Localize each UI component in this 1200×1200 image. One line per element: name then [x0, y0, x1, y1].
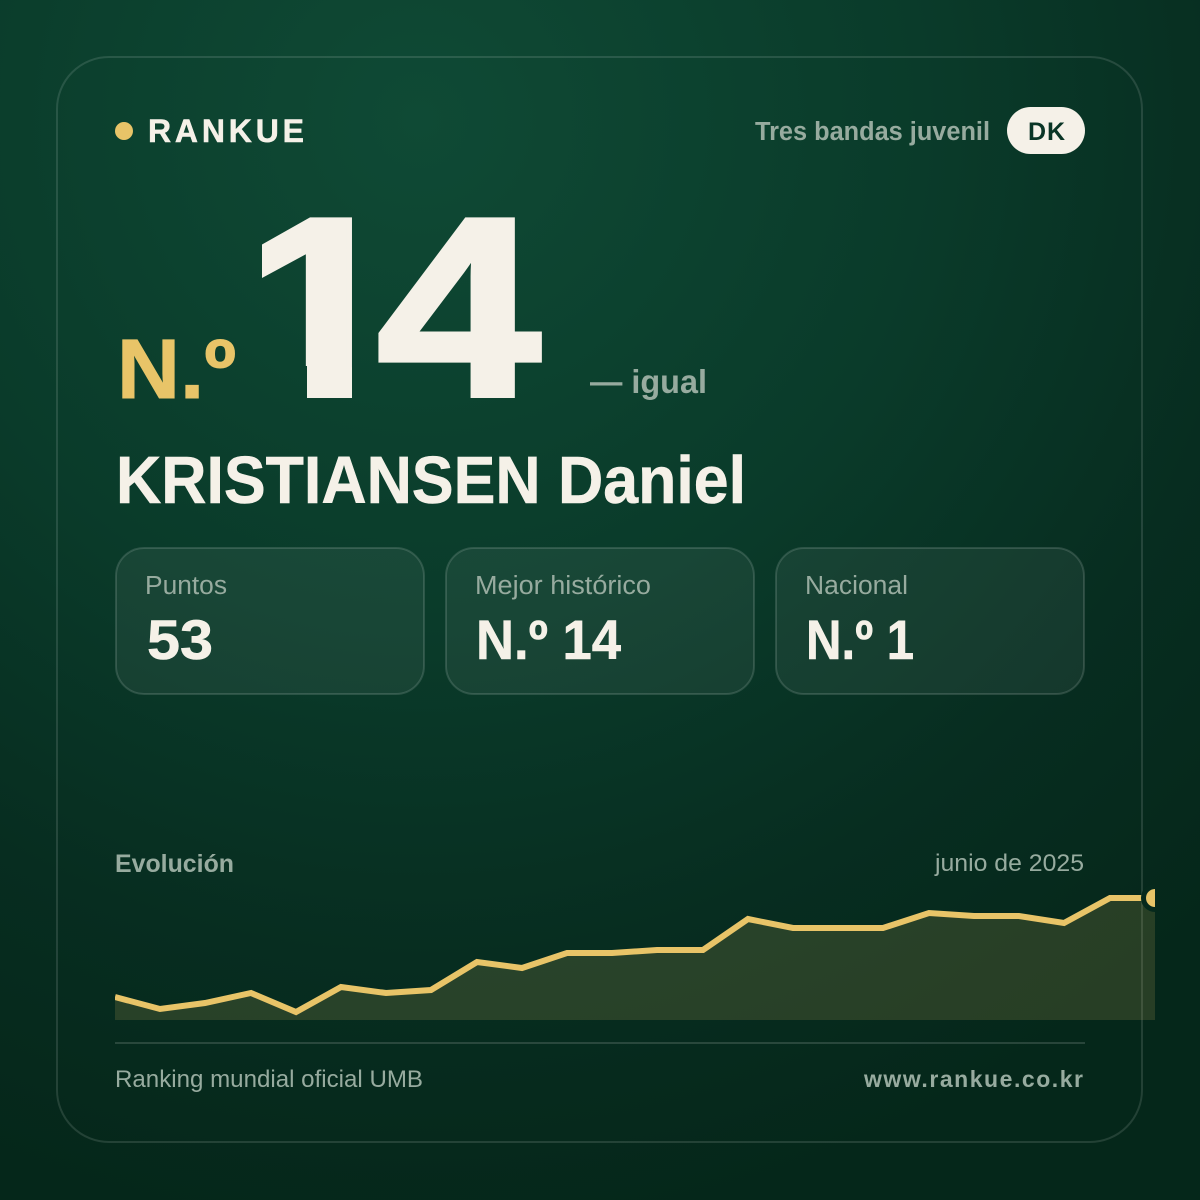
chart date: junio de 2025 [934, 850, 1084, 877]
rank change: — igual [590, 363, 707, 400]
panel: mejor historico: Mejor histórico [475, 572, 651, 600]
brand name: RANKUE [148, 113, 304, 149]
line chart: ranking evolution [115, 886, 1166, 1020]
panel: puntos: Puntos [145, 572, 227, 600]
panel: nacional [776, 548, 1084, 694]
header: category and country [755, 107, 1085, 154]
rank number: 14 [240, 165, 542, 451]
icon: brand dot [115, 122, 133, 140]
footer divider [115, 1042, 1085, 1044]
panel: puntos [116, 548, 424, 694]
footer url: www.rankue.co.kr [863, 1066, 1083, 1092]
panel: mejor historico: N.º 14 [476, 608, 621, 671]
header: brand [115, 113, 304, 149]
panel: puntos: 53 [147, 608, 213, 671]
category label: Tres bandas juvenil [755, 118, 990, 146]
panel: mejor historico [446, 548, 754, 694]
footer source: Ranking mundial oficial UMB [115, 1066, 423, 1093]
player name: KRISTIANSEN Daniel [116, 443, 746, 518]
trend line [115, 898, 1155, 1012]
chart heading: Evolución [115, 850, 234, 878]
panel: nacional: N.º 1 [806, 608, 914, 671]
panel: nacional: Nacional [805, 572, 908, 600]
country badge [1007, 107, 1085, 154]
area fill [115, 898, 1155, 1020]
country badge: DK [1028, 118, 1065, 146]
current point marker [1141, 889, 1155, 912]
rank hero [122, 217, 705, 400]
rank prefix: N.º [117, 322, 236, 416]
